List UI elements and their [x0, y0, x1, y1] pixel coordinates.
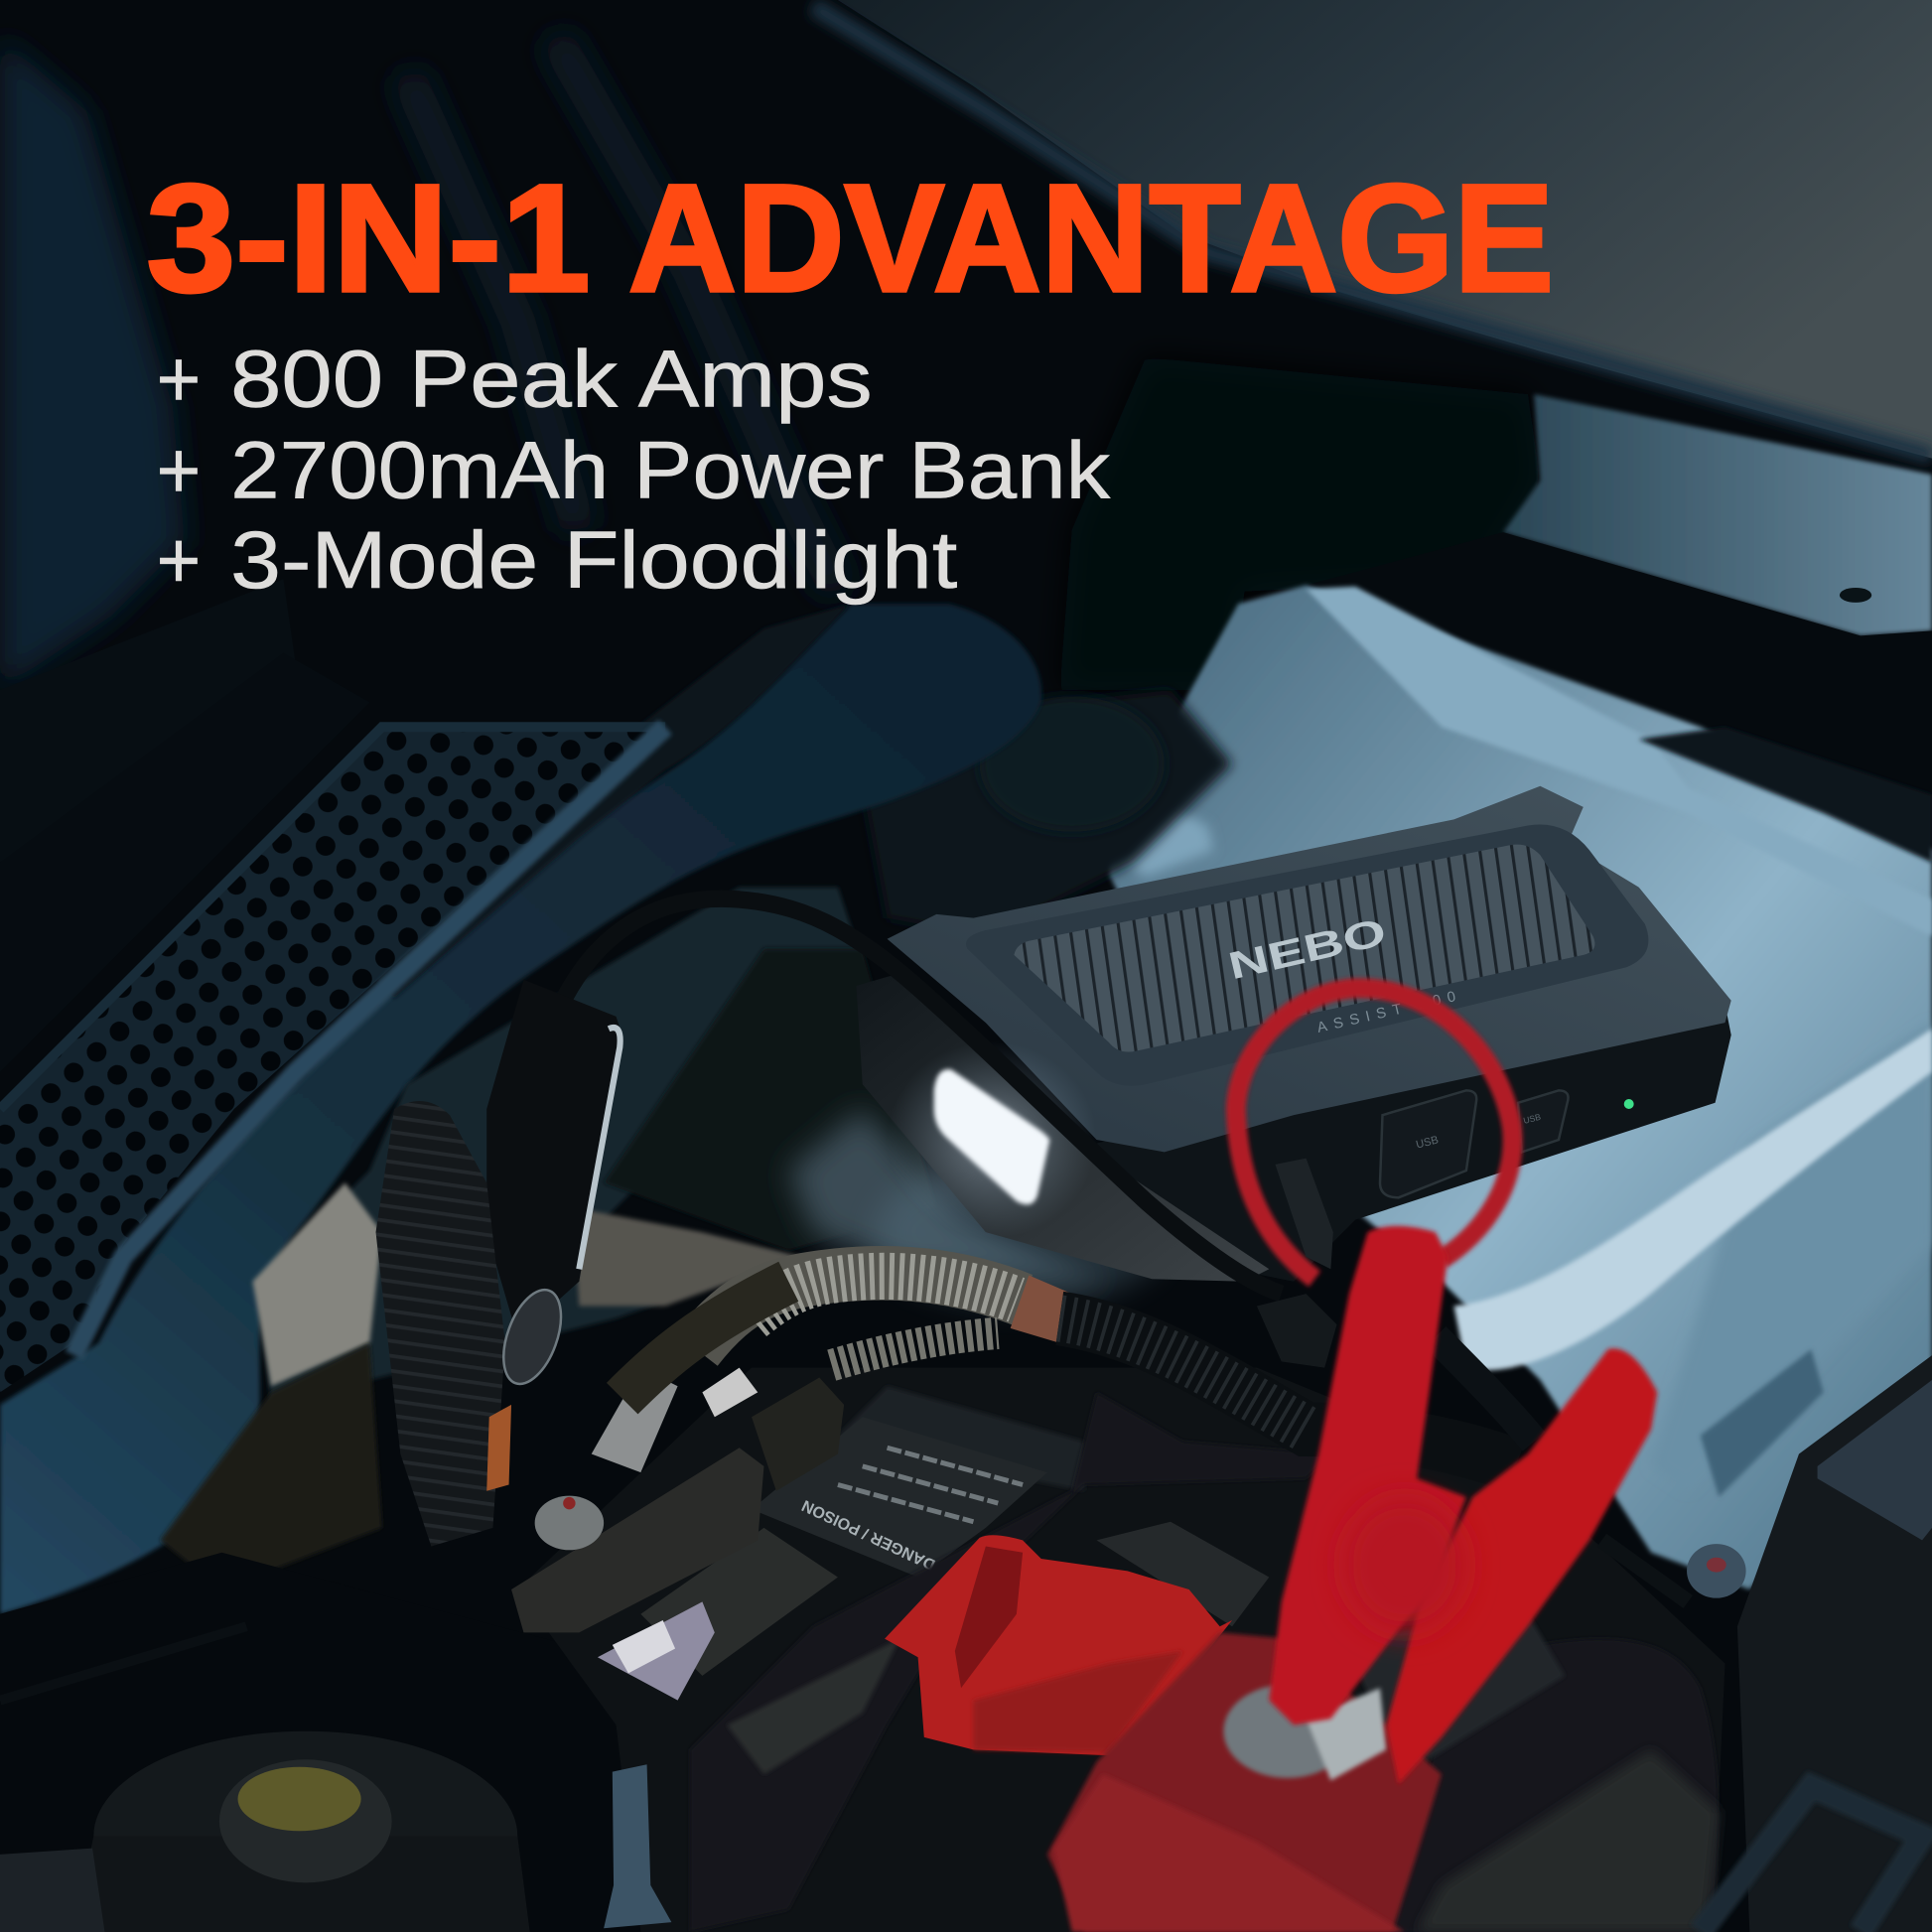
ridge bars	[838, 1386, 1084, 1491]
grille lower lip	[73, 727, 665, 1355]
terminal clip cap	[752, 1378, 844, 1491]
rusty bracket	[160, 1343, 382, 1589]
fuse box body	[1737, 1355, 1932, 1932]
cap lower	[73, 1836, 530, 1932]
blurred wiring streaks	[407, 37, 838, 592]
feature list	[157, 335, 1111, 606]
model name: ASSIST 800	[1315, 989, 1457, 1036]
bottom left plate	[0, 1849, 104, 1932]
black clamp	[376, 980, 622, 1547]
front jaw	[376, 1101, 505, 1547]
danger label	[752, 1417, 1047, 1578]
rear jaw highlight	[579, 1028, 621, 1269]
grille edge	[0, 727, 665, 1109]
NEBO logo: NEBO	[1224, 910, 1390, 988]
title: 3-IN-1	[147, 153, 590, 324]
terminal block	[511, 1448, 763, 1632]
copper contact	[486, 1405, 511, 1491]
wiper swoosh panel	[0, 604, 1041, 1614]
cover fold shadow	[955, 1547, 1023, 1688]
beige plate	[252, 1182, 382, 1386]
engine bay bright ledge	[1307, 587, 1932, 936]
engine bay blurred highlight	[1109, 801, 1213, 878]
corrugated black conduit	[1059, 1318, 1516, 1466]
dark rail	[1639, 727, 1932, 863]
battery strap	[690, 1392, 1330, 1932]
pb recycling panel	[640, 1528, 838, 1676]
strap clip black tab	[1276, 1159, 1333, 1269]
bolt center	[1707, 1558, 1726, 1573]
upper right wall	[838, 0, 1932, 459]
fuse box lid	[1818, 1380, 1932, 1540]
left dark clutter	[863, 690, 1232, 936]
QR sticker	[598, 1601, 715, 1701]
rear jaw	[486, 980, 622, 1337]
white hood strip	[1503, 394, 1932, 635]
QR code	[613, 1620, 675, 1673]
wire band	[0, 1626, 246, 1701]
inner raised frame	[966, 824, 1648, 1086]
crumpled white seam	[1453, 1029, 1932, 1370]
conduit ribs	[1059, 1318, 1307, 1430]
dark blurred wiring blob	[1059, 357, 1540, 690]
hood lip edge	[813, 6, 1932, 456]
strut tower	[980, 696, 1165, 832]
silver crimp connectors	[592, 1368, 678, 1472]
right bracket	[1701, 1787, 1922, 1932]
danger poison label text: DANGER / POISON	[799, 1496, 938, 1574]
front dark face	[1084, 1004, 1731, 1282]
under hood dark gap	[1307, 532, 1932, 863]
cap yellow disc	[238, 1767, 361, 1831]
taped section	[622, 1282, 788, 1399]
right label	[1097, 1522, 1269, 1626]
boot highlight	[1053, 1774, 1405, 1932]
conduit upper branch	[1436, 1337, 1534, 1442]
bottom left reservoir cap	[0, 1626, 671, 1932]
dark recess behind device	[604, 949, 936, 1251]
left black plastic block	[0, 653, 369, 1072]
gray tray	[1417, 1749, 1719, 1932]
feature: floodlight: 3-Mode Floodlight	[230, 515, 958, 606]
battery area	[511, 1368, 1725, 1932]
black jumper cable	[564, 898, 1282, 1294]
floodlight halo	[888, 1041, 1097, 1238]
light strip	[973, 1035, 1084, 1140]
red clamp right jaw	[1386, 1348, 1657, 1784]
jump starter device	[857, 786, 1731, 1307]
wrapped wiring harness	[622, 1273, 1688, 1601]
bolt red dot	[563, 1497, 576, 1509]
copper tape	[1011, 1276, 1072, 1343]
cap body	[93, 1731, 517, 1932]
USB port flap	[1380, 1090, 1476, 1197]
floodlight lens	[934, 1069, 1049, 1204]
battery top	[517, 1368, 1725, 1932]
title: ADVANTAGE	[628, 153, 1554, 324]
clamp pivot	[492, 1282, 572, 1392]
red strap loop	[1236, 988, 1513, 1279]
terminal post highlight	[1307, 1688, 1386, 1780]
right thin cable	[1601, 1540, 1688, 1601]
clamp pivot	[1343, 1497, 1466, 1632]
USB on off button	[1518, 1090, 1569, 1152]
terminal bolt	[535, 1496, 604, 1550]
feature: floodlight: +	[157, 515, 201, 606]
feature: power bank: 2700mAh Power Bank	[230, 425, 1111, 515]
second sleeve cable	[832, 1333, 998, 1365]
label warning lines	[838, 1448, 1023, 1522]
bottom right fuse box	[1343, 1355, 1932, 1932]
metal plate	[259, 888, 863, 1405]
top cover	[888, 786, 1731, 1152]
bay folded metal dark panels	[1651, 1023, 1932, 1491]
cap hub	[219, 1759, 392, 1882]
open red cover	[885, 1535, 1232, 1756]
bay bolt	[1687, 1544, 1746, 1598]
cover bright lower	[973, 1651, 1182, 1752]
ribbed panel	[1014, 845, 1594, 1051]
metal sleeve cable	[696, 1273, 1023, 1349]
engine bay light body	[1109, 586, 1932, 1589]
rubber trim	[1392, 1639, 1719, 1932]
sleeve ribs	[752, 1276, 1017, 1318]
swoosh dark interior	[369, 604, 850, 998]
green LED	[1624, 1099, 1634, 1109]
heading block	[147, 153, 1554, 606]
mounting bolt	[604, 1764, 671, 1928]
feature: peak amps: 800 Peak Amps	[230, 335, 873, 425]
left end face	[857, 973, 1269, 1282]
hood hole	[1840, 588, 1871, 603]
feature: power bank: +	[157, 425, 201, 515]
device glow	[875, 1159, 1171, 1307]
cowl grille	[0, 727, 665, 1392]
beige plate right	[573, 1207, 801, 1307]
USB button label: USB	[1522, 1112, 1542, 1126]
hex bolt	[1257, 1294, 1337, 1368]
terminal boot	[1047, 1632, 1442, 1932]
bay recess	[1701, 1349, 1824, 1497]
dark upper band	[0, 579, 296, 863]
red clamp left jaw	[1269, 1226, 1466, 1725]
sticker label	[702, 1368, 758, 1417]
feature: peak amps: +	[157, 335, 201, 425]
strap inner	[727, 1639, 899, 1774]
USB label: USB	[1415, 1134, 1440, 1152]
battery cell panel	[1343, 1614, 1565, 1774]
lower left darkness	[0, 1553, 863, 1932]
ground textured surface	[788, 1109, 1109, 1282]
red clamp and battery cover	[885, 988, 1657, 1932]
terminal post	[1223, 1685, 1351, 1778]
title	[147, 153, 1554, 324]
upper left textured panel	[0, 37, 185, 690]
